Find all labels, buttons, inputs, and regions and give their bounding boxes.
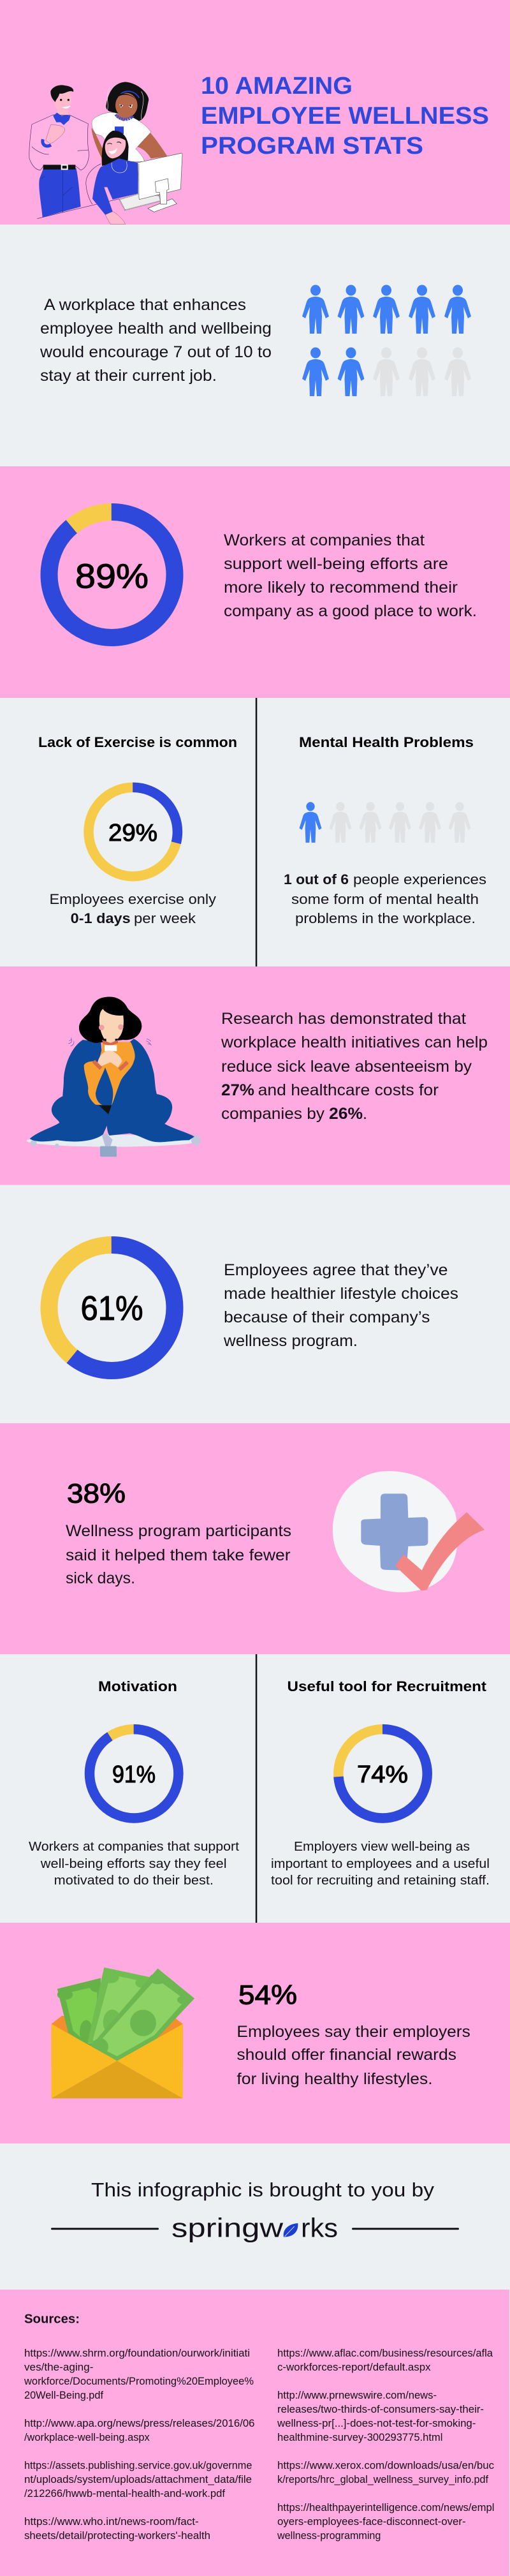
- text: exercise days: per week: [134, 910, 196, 926]
- text: sources left column: /212266/hwwb-mental-health-and-work.pdf: [24, 2487, 225, 2499]
- text: motivation: well-being efforts say they feel: [40, 1857, 227, 1871]
- text: recommend company: Workers at companies that: [224, 531, 425, 549]
- text: sources left column: sheets/detail/protecting-workers'-health: [24, 2529, 210, 2542]
- heading: sources: Sources:: [24, 2313, 80, 2327]
- panel: healthier choices: [0, 1185, 510, 1423]
- heading: motivation: Motivation: [98, 1678, 177, 1694]
- text: sick leave: 27%: [221, 1081, 254, 1099]
- text: healthier choices: made healthier lifestyle choices: [224, 1285, 458, 1303]
- text: recommend company: [224, 531, 477, 620]
- text: mental health: [284, 871, 486, 926]
- text: healthier choices: wellness program.: [223, 1332, 358, 1350]
- panel: brought to you by: [0, 2143, 510, 2290]
- text: sources right column: c-workforces-report/default.aspx: [277, 2361, 431, 2373]
- text: sources right column: releases/two-thirds-of-consumers-say-their-: [277, 2403, 484, 2415]
- text: sick leave: .: [363, 1105, 367, 1123]
- text: sick leave: [221, 1010, 488, 1123]
- pictogram: 7 of 10 people: [302, 285, 471, 396]
- title: EMPLOYEE WELLNESS: [201, 103, 489, 130]
- donut chart: 89%: 89%: [75, 558, 149, 596]
- text: recommend company: support well-being efforts are: [224, 555, 448, 573]
- text: sources left column: [24, 2347, 254, 2542]
- text: sources right column: https://www.aflac.com/business/resources/afla: [277, 2347, 493, 2359]
- text: mental health: 1 out of 6: [284, 871, 349, 887]
- text: sources right column: wellness-programming: [277, 2529, 381, 2542]
- panel: motivation and recruitment: [0, 1654, 510, 1923]
- text: recruitment: [271, 1840, 490, 1888]
- donut chart: 74%: [339, 1729, 427, 1818]
- text: sources right column: k/reports/hrc_global_wellness_survey_info.pdf: [277, 2473, 488, 2485]
- text: 7 out of 10: A workplace that enhances: [44, 296, 246, 314]
- text: sick leave: 26%: [329, 1105, 363, 1123]
- text: motivation: motivated to do their best.: [54, 1874, 214, 1888]
- panel: exercise and mental health: [0, 698, 510, 966]
- text: healthier choices: [223, 1261, 458, 1350]
- text: sources right column: wellness-pr[...]-does-not-test-for-smoking-: [277, 2417, 476, 2429]
- icon: medical cross with check: [333, 1471, 484, 1592]
- text: sources right column: http://www.prnewswire.com/news-: [277, 2389, 437, 2401]
- text: financial rewards: for living healthy lifestyles.: [237, 2070, 433, 2088]
- text: sources right column: healthmine-survey-300293775.html: [277, 2431, 442, 2443]
- donut chart: 29%: 29%: [108, 820, 157, 847]
- heading: lack of exercise: Lack of Exercise is common: [38, 734, 237, 750]
- text: recruitment: important to employees and a useful: [271, 1857, 490, 1871]
- heading: recruitment: Useful tool for Recruitment: [287, 1678, 487, 1694]
- text: mental health: problems in the workplace.: [295, 910, 476, 926]
- text: sources right column: oyers-employees-face-disconnect-over-: [277, 2515, 466, 2528]
- text: sources left column: http://www.apa.org/news/press/releases/2016/06: [24, 2417, 255, 2429]
- donut chart: 74%: 74%: [357, 1761, 408, 1788]
- illustration: three coworkers at a computer: [29, 82, 182, 225]
- text: recruitment: tool for recruiting and retaining staff.: [271, 1874, 490, 1888]
- stat: 54%: 54%: [238, 1980, 297, 2011]
- logo: springworks: springw: [171, 2213, 284, 2243]
- panel: sources: [0, 2290, 510, 2576]
- logo: springworks: [51, 2213, 459, 2243]
- icon: envelope with money: [52, 1967, 194, 2098]
- text: 7 out of 10: [40, 296, 272, 385]
- text: sick leave: and healthcare costs for: [258, 1081, 439, 1099]
- donut chart: 29%: [89, 787, 177, 877]
- text: mental health: people experiences: [353, 871, 486, 887]
- text: exercise days: 0-1 days: [71, 910, 131, 926]
- text: fewer sick days: [66, 1522, 291, 1587]
- text: sources left column: 20Well-Being.pdf: [24, 2389, 103, 2401]
- donut chart: 61%: 61%: [80, 1289, 143, 1328]
- panel: sick leave: [0, 966, 510, 1185]
- title: [201, 73, 489, 159]
- donut chart: 91%: 91%: [112, 1761, 156, 1788]
- text: sources left column: https://www.shrm.org/foundation/ourwork/initiati: [24, 2347, 250, 2359]
- text: sources left column: /workplace-well-being.aspx: [24, 2431, 150, 2443]
- text: sources left column: ves/the-aging-: [24, 2361, 93, 2373]
- text: sources left column: nt/uploads/system/uploads/attachment_data/file: [24, 2473, 252, 2485]
- text: financial rewards: [237, 2023, 470, 2088]
- text: 7 out of 10: stay at their current job.: [40, 367, 217, 385]
- text: recruitment: Employers view well-being as: [294, 1840, 470, 1854]
- text: healthier choices: Employees agree that they’ve: [224, 1261, 448, 1279]
- text: healthier choices: because of their company’s: [224, 1308, 430, 1326]
- illustration: woman wrapped in blanket: [27, 996, 201, 1157]
- text: sources right column: [277, 2347, 495, 2542]
- text: sick leave: reduce sick leave absenteeism by: [221, 1058, 472, 1076]
- text: 7 out of 10: would encourage 7 out of 10 to: [40, 343, 272, 361]
- icon: leaf: [284, 2223, 298, 2237]
- text: mental health: some form of mental health: [291, 891, 479, 907]
- panel: header: [0, 0, 510, 225]
- panel: fewer sick days: [0, 1423, 510, 1654]
- heading: mental health: Mental Health Problems: [299, 734, 474, 750]
- text: sick leave: Research has demonstrated that: [221, 1010, 466, 1028]
- text: brought to you by: This infographic is brought to you by: [91, 2179, 435, 2201]
- text: fewer sick days: said it helped them take fewer: [66, 1546, 291, 1564]
- title: PROGRAM STATS: [201, 133, 423, 159]
- logo: springworks: o: [284, 2213, 298, 2243]
- text: motivation: Workers at companies that support: [29, 1840, 239, 1854]
- text: exercise days: [50, 891, 216, 926]
- logo: springworks: rks: [301, 2213, 338, 2243]
- text: sources left column: workforce/Documents/Promoting%20Employee%: [24, 2375, 254, 2387]
- text: fewer sick days: sick days.: [66, 1569, 135, 1587]
- title: 10 AMAZING: [201, 73, 353, 100]
- panel: 89 percent recommend: [0, 466, 510, 698]
- text: exercise days: Employees exercise only: [50, 891, 216, 907]
- text: sick leave: workplace health initiatives can help: [221, 1033, 488, 1051]
- text: recommend company: company as a good place to work.: [224, 602, 477, 620]
- stat: 38%: 38%: [67, 1479, 126, 1509]
- text: fewer sick days: Wellness program participants: [66, 1522, 291, 1540]
- text: sources left column: https://assets.publishing.service.gov.uk/governme: [24, 2459, 252, 2471]
- text: financial rewards: should offer financial rewards: [237, 2046, 456, 2064]
- text: sick leave: companies by: [221, 1105, 325, 1123]
- text: motivation: [29, 1840, 239, 1888]
- text: financial rewards: Employees say their employers: [237, 2023, 470, 2041]
- text: sources right column: https://www.xerox.com/downloads/usa/en/buc: [277, 2459, 494, 2471]
- text: sources left column: https://www.who.int/news-room/fact-: [24, 2515, 199, 2528]
- text: 7 out of 10: employee health and wellbeing: [40, 320, 272, 337]
- text: recommend company: more likely to recommend their: [224, 579, 458, 596]
- panel: 7 out of 10 stay: [0, 225, 510, 466]
- text: sources right column: https://healthpayerintelligence.com/news/empl: [277, 2501, 495, 2513]
- donut chart: 89%: [49, 512, 175, 638]
- donut chart: 91%: [89, 1729, 178, 1818]
- donut chart: 61%: [49, 1245, 175, 1370]
- pictogram: 1 of 6 people: [300, 802, 470, 843]
- panel: financial rewards: [0, 1923, 510, 2143]
